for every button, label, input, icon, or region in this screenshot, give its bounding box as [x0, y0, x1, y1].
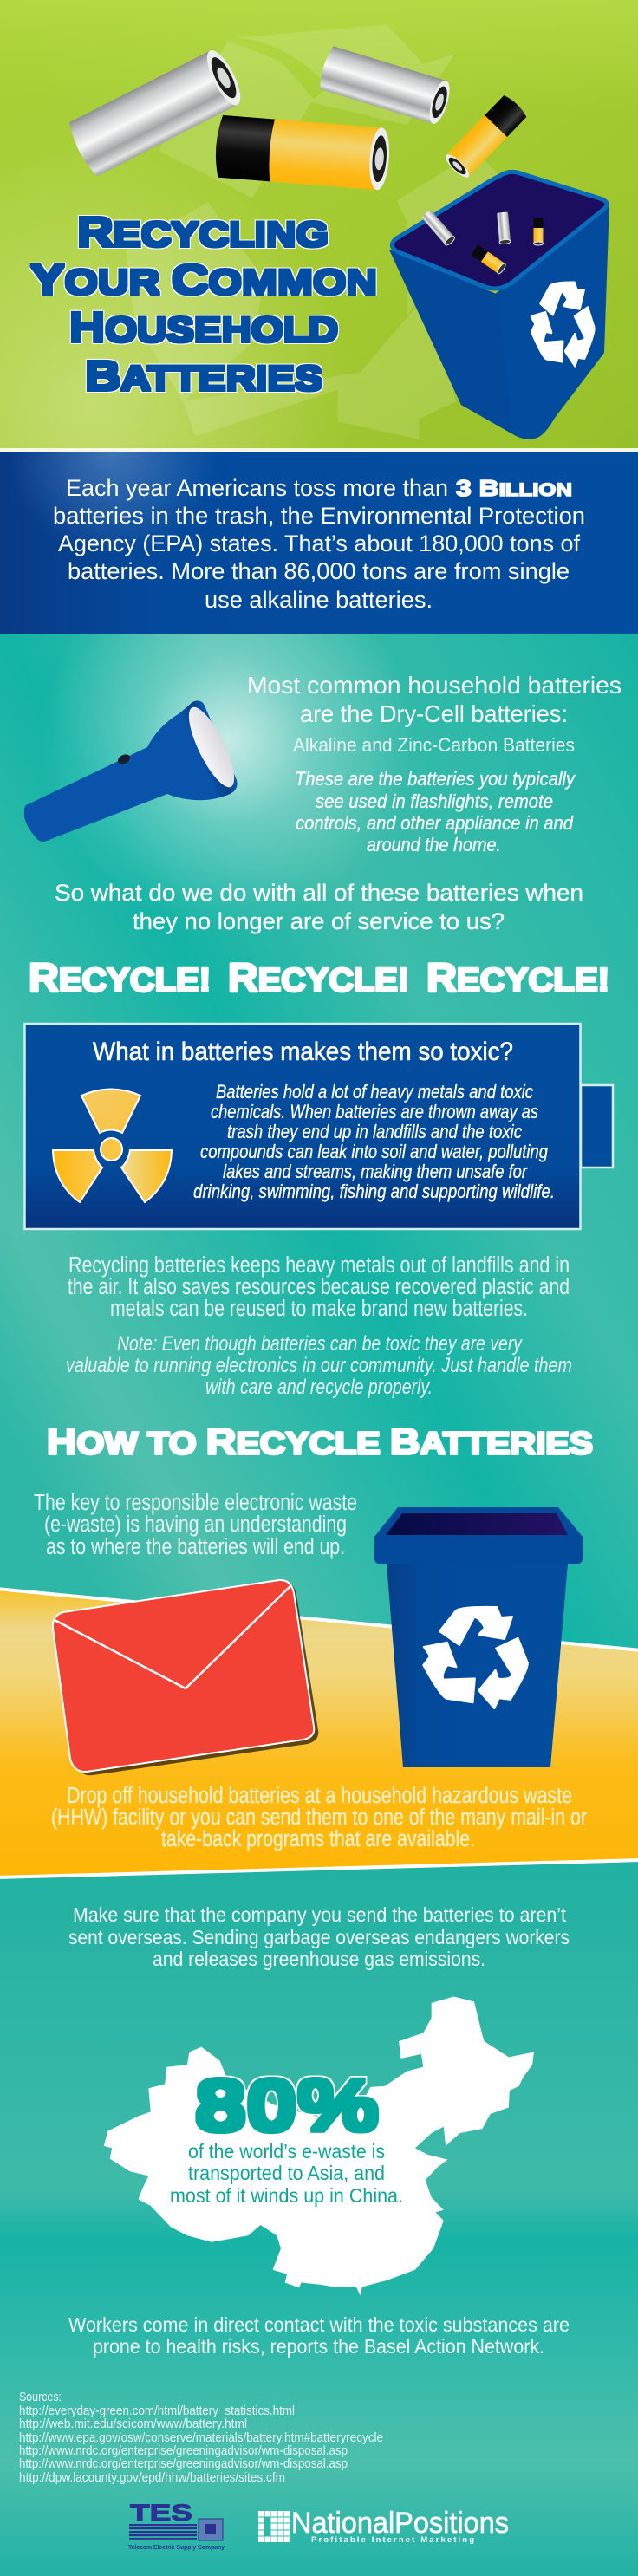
note text: Note: Even though batteries can be toxic they are very [117, 1332, 523, 1356]
intro text: Agency (EPA) states. That’s about 180,000 tons of [58, 530, 580, 556]
battery: medium silver [317, 45, 453, 126]
bin opening [386, 1513, 568, 1535]
bin opening [392, 172, 607, 289]
italic explanation: see used in flashlights, remote [316, 790, 553, 812]
e-waste intro text [34, 1491, 357, 1559]
logo: TES: TES [130, 2500, 192, 2526]
title: RECYCLING [77, 210, 329, 256]
faint recycling watermark [127, 25, 498, 439]
heading: recycle x3: RECYCLE! [29, 955, 211, 1000]
intro text: use alkaline batteries. [205, 587, 433, 613]
panel: battery-shaped toxicity box [24, 1024, 613, 1229]
workers text: prone to health risks, reports the Basel Action Network. [93, 2335, 544, 2358]
recycling symbol on bin [525, 282, 602, 373]
e-waste intro text: as to where the batteries will end up. [46, 1535, 345, 1559]
heading: recycle x3 [29, 955, 609, 1000]
battery: small yellow and black [443, 94, 528, 180]
hero panel [0, 0, 638, 451]
statistic caption: of the world’s e-waste is [188, 2140, 385, 2163]
icon: red envelope [53, 1580, 318, 1775]
panel heading: What in batteries makes them so toxic? [93, 1038, 513, 1066]
sources list: http://everyday-green.com/html/battery_statistics.html [19, 2404, 295, 2418]
intro text: Each year Americans toss more than [66, 475, 448, 501]
recycling symbol [415, 1607, 539, 1714]
drop-off text [51, 1784, 587, 1851]
panel paragraph: lakes and streams, making them unsafe for [223, 1161, 528, 1182]
heading: recycle x3: RECYCLE! [228, 955, 409, 1000]
panel paragraph: compounds can leak into soil and water, polluting [200, 1141, 549, 1162]
italic explanation [295, 768, 576, 855]
heading: recycle x3: RECYCLE! [426, 955, 609, 1000]
italic explanation: These are the batteries you typically [295, 768, 576, 790]
flashlight icon [24, 700, 243, 842]
note text [66, 1332, 572, 1399]
italic explanation: around the home. [367, 834, 501, 855]
tiny batteries in bin [421, 210, 543, 275]
logo: National Positions: NationalPositions [291, 2507, 509, 2540]
statistic caption: transported to Asia, and [188, 2162, 385, 2184]
intro panel [0, 452, 638, 634]
drop-off text: take-back programs that are available. [161, 1827, 475, 1851]
heading: how to recycle: HOW TO RECYCLE BATTERIES [47, 1421, 593, 1461]
yellow diagonal band [0, 1589, 638, 1877]
question text [55, 880, 583, 934]
dry-cell text block [247, 672, 622, 855]
sources list: http://dpw.lacounty.gov/epd/hhw/batteries/sites.cfm [19, 2471, 285, 2485]
statistic: 80 percent: 80% [195, 2065, 379, 2146]
recycling benefits text: metals can be reused to make brand new batteries. [110, 1297, 528, 1321]
dry-cell text block: Alkaline and Zinc-Carbon Batteries [293, 734, 575, 756]
workers text [68, 2313, 570, 2358]
panel paragraph: trash they end up in landfills and the toxic [227, 1121, 522, 1142]
intro text: batteries. More than 86,000 tons are from single [68, 558, 570, 584]
sources list: http://web.mit.edu/scicom/www/battery.html [19, 2417, 247, 2431]
sources list [19, 2391, 383, 2485]
teal section background [0, 634, 638, 1657]
sources list: http://www.nrdc.org/enterprise/greeningadvisor/wm-disposal.asp [19, 2457, 348, 2471]
battery: large yellow and black [213, 115, 392, 191]
intro text [53, 475, 585, 613]
e-waste intro text: The key to responsible electronic waste [34, 1491, 357, 1515]
overseas warning text: sent overseas. Sending garbage overseas endangers workers [68, 1926, 570, 1948]
panel paragraph: Batteries hold a lot of heavy metals and toxic [216, 1081, 533, 1103]
recycling benefits text [68, 1253, 570, 1321]
logo: TES [128, 2500, 225, 2551]
note text: with care and recycle properly. [205, 1376, 433, 1399]
sources list: Sources: [19, 2391, 62, 2404]
battery body [24, 1024, 581, 1229]
panel paragraph: chemicals. When batteries are thrown away as [211, 1101, 538, 1122]
dry-cell text block: are the Dry-Cell batteries: [300, 700, 568, 727]
statistic: 80 percent [170, 2065, 403, 2207]
white divider under hero [0, 448, 638, 452]
question text: So what do we do with all of these batteries when [55, 880, 583, 906]
sources list: http://www.nrdc.org/enterprise/greeningadvisor/wm-disposal.asp [19, 2444, 348, 2458]
panel paragraph: drinking, swimming, fishing and supporting wildlife. [193, 1181, 555, 1202]
e-waste intro text: (e-waste) is having an understanding [44, 1512, 347, 1537]
battery terminal tab [581, 1085, 613, 1168]
battery: large silver [66, 46, 247, 179]
icon: radiation hazard [53, 1089, 172, 1202]
statistic caption: most of it winds up in China. [170, 2184, 403, 2207]
intro text: 3 B ILLION [456, 475, 572, 501]
overseas warning text [68, 1903, 570, 1970]
sources list: http://www.epa.gov/osw/conserve/materials/battery.htm#batteryrecycle [19, 2431, 383, 2445]
workers text: Workers come in direct contact with the toxic substances are [68, 2313, 570, 2336]
panel paragraph [193, 1081, 555, 1202]
lower teal background [0, 1855, 638, 2576]
logo: National Positions: Profitable Internet Marketing [311, 2535, 474, 2545]
overseas warning text: and releases greenhouse gas emissions. [153, 1948, 485, 1970]
title: HOUSEHOLD [69, 305, 338, 351]
title: BATTERIES [85, 354, 322, 400]
intro text: batteries in the trash, the Environmental Protection [53, 503, 585, 529]
question text: they no longer are of service to us? [133, 908, 505, 934]
statistic caption [170, 2140, 403, 2207]
overseas warning text: Make sure that the company you send the batteries to aren’t [73, 1903, 567, 1926]
map of China [104, 1996, 534, 2295]
recycling bin, isometric [389, 172, 609, 439]
title: YOUR COMMON [30, 257, 377, 303]
recycling bin, front view [374, 1507, 583, 1767]
dry-cell text block: Most common household batteries [247, 672, 622, 699]
title [30, 210, 377, 400]
logo: TES: Telecom Electric Supply Company [128, 2545, 225, 2551]
italic explanation: controls, and other appliance in and [296, 812, 574, 834]
